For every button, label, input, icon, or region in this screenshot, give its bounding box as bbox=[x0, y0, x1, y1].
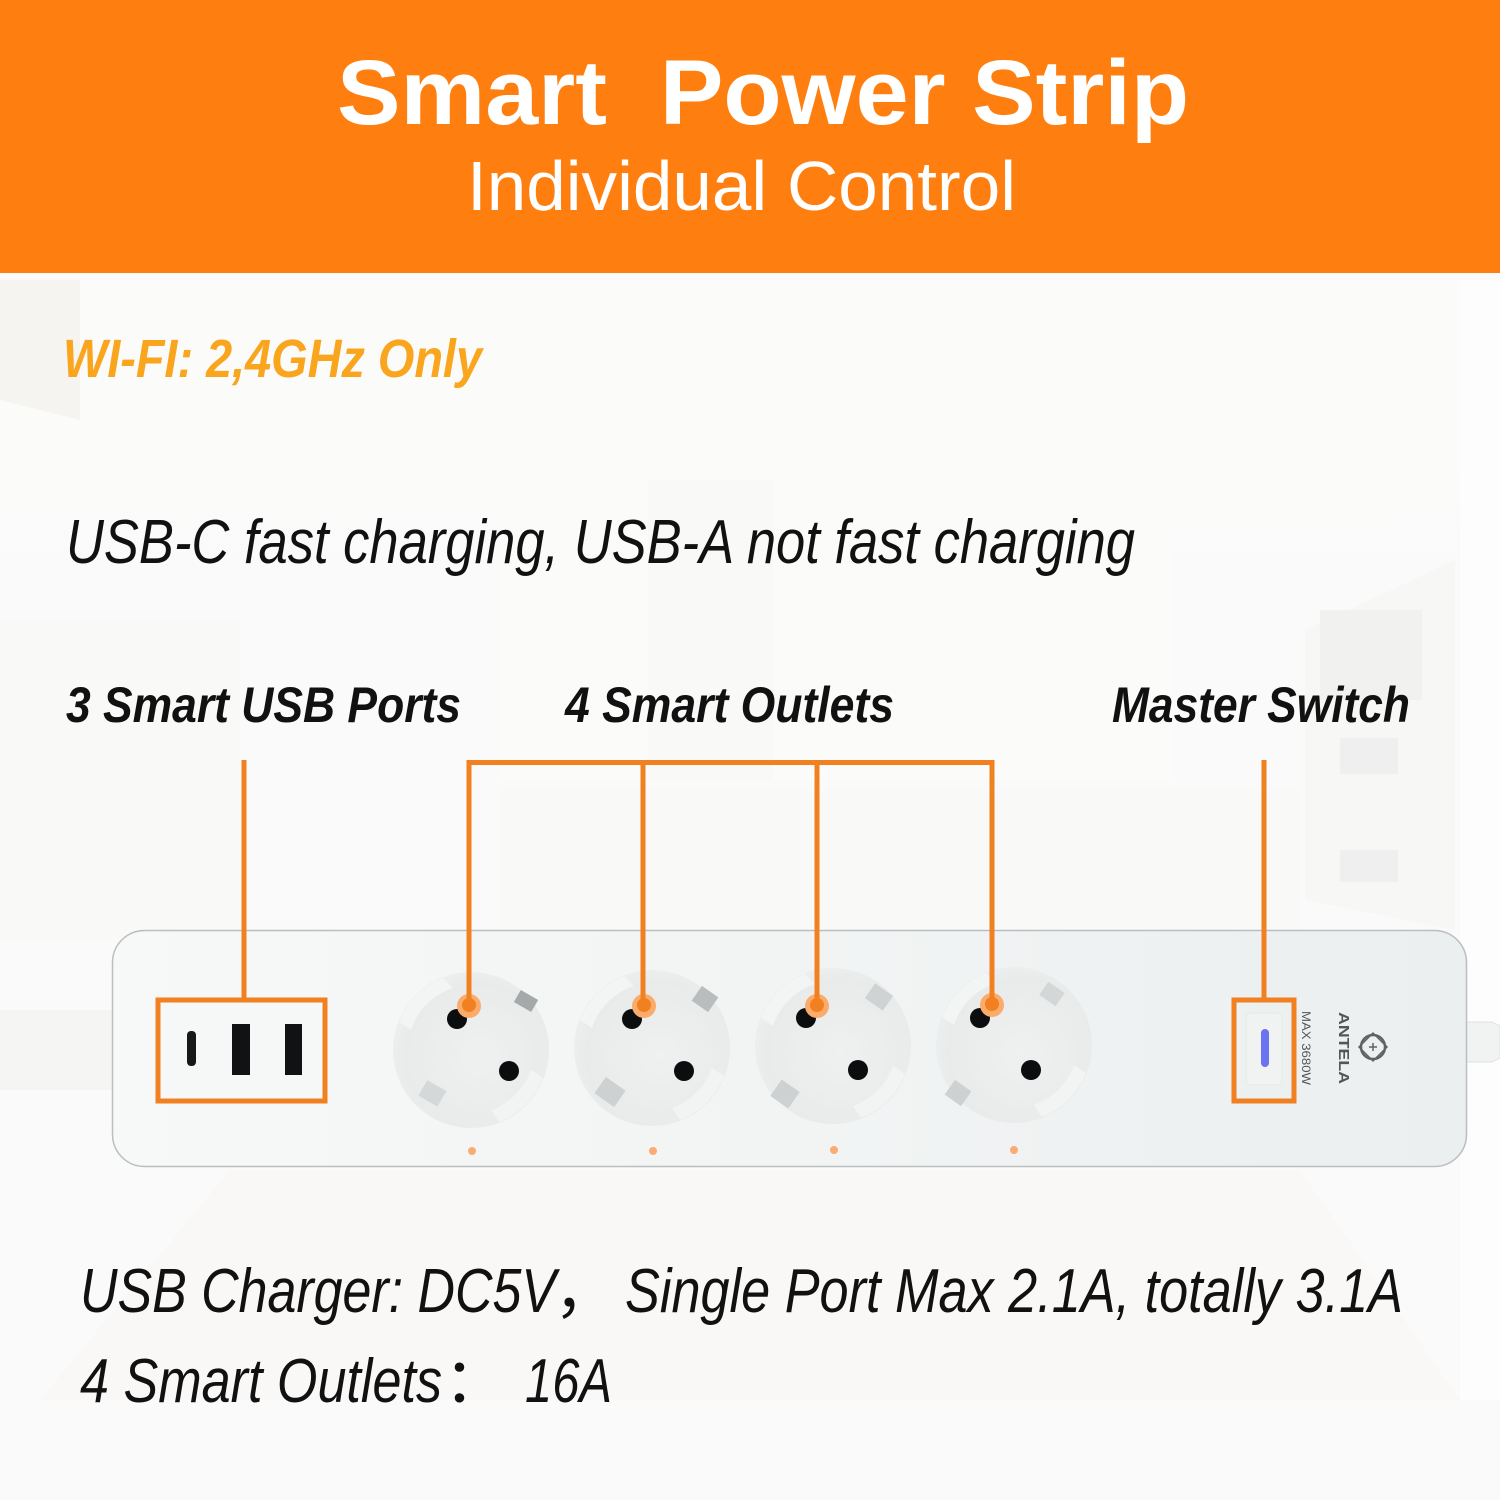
outlet indicator lights bbox=[468, 1146, 1018, 1155]
callout: master switch bbox=[1234, 760, 1294, 1101]
USB charging note: USB-C fast charging, USB-A not fast charging bbox=[66, 508, 1135, 577]
strip body bbox=[112, 930, 1466, 1166]
USB-C port bbox=[187, 1031, 196, 1066]
subtitle: Individual Control bbox=[467, 147, 1016, 225]
callout: outlets bbox=[457, 762, 1004, 1018]
header banner bbox=[0, 0, 1500, 273]
USB charger spec bbox=[80, 1257, 1403, 1326]
USB-A port 2 bbox=[285, 1024, 302, 1075]
label: outlets: 4 Smart Outlets bbox=[564, 677, 894, 733]
title: Smart Power Strip bbox=[337, 42, 1189, 144]
outlet spec: ： bbox=[444, 1347, 506, 1416]
power cord bbox=[1465, 1022, 1500, 1062]
max wattage text: MAX 3680W bbox=[1299, 1011, 1311, 1085]
label: master switch: Master Switch bbox=[1112, 677, 1410, 733]
USB charger spec: USB Charger: DC5V bbox=[80, 1257, 561, 1326]
socket 3 bbox=[755, 968, 911, 1124]
brand logo bbox=[1359, 1033, 1387, 1061]
label: USB ports: 3 Smart USB Ports bbox=[66, 677, 461, 733]
socket 1 bbox=[393, 972, 549, 1128]
outlet spec: 4 Smart Outlets bbox=[80, 1347, 442, 1416]
USB-A port 1 bbox=[232, 1024, 250, 1075]
Wi-Fi note: WI-FI: 2,4GHz Only bbox=[63, 329, 485, 389]
USB charger spec: ， bbox=[554, 1257, 616, 1326]
brand name: ANTELA bbox=[1335, 1012, 1352, 1084]
callout: USB ports bbox=[158, 760, 325, 1101]
master switch button bbox=[1246, 1013, 1282, 1085]
socket 2 bbox=[574, 970, 730, 1126]
outlet spec: 16A bbox=[525, 1347, 612, 1416]
socket 4 bbox=[936, 967, 1092, 1123]
power strip bbox=[112, 930, 1466, 1166]
